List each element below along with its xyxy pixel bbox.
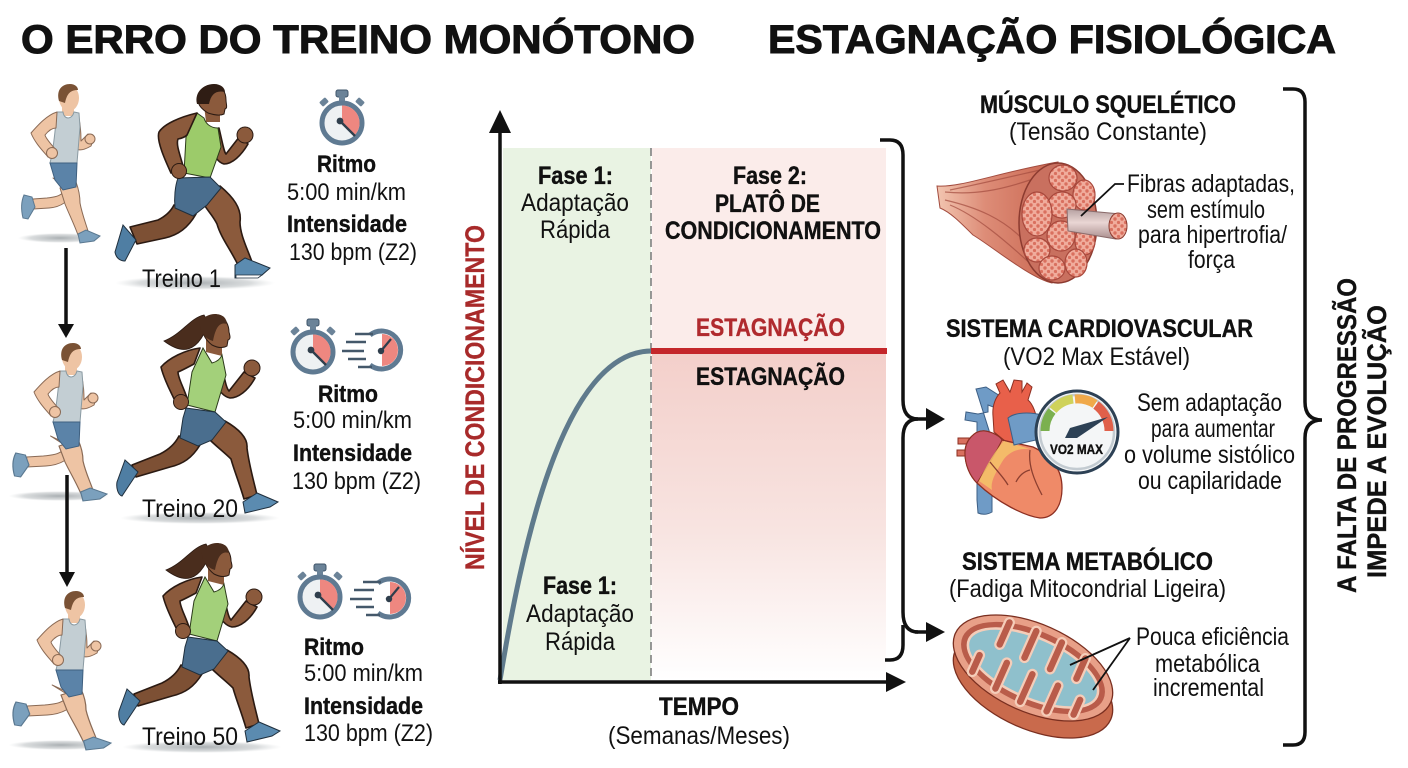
arrow: to metabolic: [915, 622, 945, 642]
label: fase 2: [665, 162, 881, 245]
description: músculo: [1127, 170, 1295, 274]
label: treino 50: Treino 50: [142, 723, 238, 751]
icon: stopwatch: [290, 319, 336, 372]
axis label: x: [608, 693, 790, 750]
axis: vertical: [489, 110, 511, 684]
icon: vo2 max gauge: VO2 MAX: [1050, 441, 1104, 457]
runner: woman in green tank: [117, 314, 280, 524]
description: cardiovascular: Sem adaptação: [1137, 389, 1282, 417]
title: o erro do treino monótono: O ERRO DO TREINO MONÓTONO: [21, 16, 695, 62]
stats: treino 20: 5:00 min/km: [293, 407, 412, 434]
runner: man in grey tank: [8, 591, 114, 750]
icon: mitochondrion: [937, 593, 1130, 760]
stats: treino 1: Ritmo: [317, 151, 376, 178]
description: cardiovascular: para aumentar: [1151, 415, 1275, 443]
heading: músculo: [980, 89, 1236, 146]
chart: plateau curve: [459, 110, 906, 750]
stats: treino 50: 5:00 min/km: [304, 660, 423, 687]
description: músculo: Fibras adaptadas,: [1127, 170, 1295, 198]
heading: metabólico: (Fadiga Mitocondrial Ligeira): [949, 575, 1226, 603]
runner: woman in green tank: [119, 543, 282, 753]
runner: man in grey tank: [18, 84, 102, 243]
stats: treino 1: [287, 151, 417, 266]
arrow: to cardiovascular: [915, 408, 945, 430]
heading: cardiovascular: (VO2 Max Estável): [1003, 343, 1190, 371]
arrow: treino 1 to treino 20: [58, 248, 74, 338]
icon: vo2 max gauge: [1036, 391, 1118, 473]
stats: treino 50: Intensidade: [304, 693, 423, 720]
heading: músculo: (Tensão Constante): [1009, 118, 1207, 146]
stats: treino 50: [304, 634, 433, 747]
stats: treino 50: 130 bpm (Z2): [304, 720, 433, 747]
label: fase 1 bottom: Fase 1:: [543, 572, 617, 600]
label: fase 1 bottom: Rápida: [545, 628, 615, 656]
label: fase 1 top: [521, 162, 629, 244]
curve: conditioning level: [500, 351, 651, 680]
conclusion: vertical text: A FALTA DE PROGRESSÃO: [1331, 278, 1362, 593]
label: estagnação black: ESTAGNAÇÃO: [696, 361, 845, 391]
label: fase 2: CONDICIONAMENTO: [665, 217, 881, 245]
icon: stopwatch: [297, 564, 343, 617]
bracket: right brace: [1283, 89, 1322, 745]
panel: sistema cardiovascular: [946, 315, 1295, 518]
panel: treino 20: [9, 314, 421, 524]
axis label: x: TEMPO: [659, 693, 739, 721]
heading: músculo: MÚSCULO SQUELÉTICO: [980, 89, 1236, 119]
heading: metabólico: [949, 546, 1226, 603]
description: metabólico: metabólica: [1155, 650, 1260, 678]
heading: cardiovascular: [946, 315, 1253, 371]
description: músculo: força: [1188, 246, 1235, 274]
icon: stopwatch: [319, 90, 365, 143]
axis label: x: (Semanas/Meses): [608, 722, 790, 750]
axis: horizontal: [498, 672, 906, 692]
description: metabólico: [1136, 623, 1289, 702]
heading: metabólico: SISTEMA METABÓLICO: [962, 546, 1213, 576]
bracket: chart to systems: [880, 140, 945, 660]
label: treino 20: Treino 20: [142, 495, 238, 523]
label: fase 2: Fase 2:: [733, 162, 807, 190]
arrow: treino 20 to treino 50: [59, 475, 75, 587]
icon: muscle cross-section: [937, 162, 1127, 283]
runner: man in grey tank: [9, 343, 109, 501]
label: fase 2: PLATÔ DE: [715, 188, 820, 218]
stats: treino 1: 130 bpm (Z2): [289, 239, 417, 266]
description: metabólico: Pouca eficiência: [1136, 623, 1289, 651]
panel: treino 50: [8, 543, 433, 753]
description: cardiovascular: ou capilaridade: [1138, 467, 1282, 495]
stats: treino 1: 5:00 min/km: [287, 179, 406, 206]
axis label: y: NÍVEL DE CONDICIONAMENTO: [459, 225, 490, 570]
description: músculo: para hipertrofia/: [1138, 221, 1287, 249]
label: fase 1 bottom: Adaptação: [526, 600, 634, 628]
panel: treino 1: [18, 84, 417, 293]
icon: fast stopwatch: [342, 331, 401, 369]
description: cardiovascular: o volume sistólico: [1124, 441, 1295, 469]
chart region: fase 1: [503, 148, 651, 680]
conclusion: vertical text: IMPEDE A EVOLUÇÃO: [1361, 305, 1392, 578]
stats: treino 20: Ritmo: [318, 381, 378, 408]
label: estagnação red: ESTAGNAÇÃO: [696, 312, 845, 342]
panel: sistema metabólico: [937, 546, 1289, 760]
icon: fast stopwatch: [350, 579, 409, 617]
icon: heart: [957, 380, 1062, 518]
line: plateau: [651, 348, 887, 354]
conclusion: vertical text: [1331, 278, 1392, 593]
stats: treino 20: [292, 381, 421, 495]
label: fase 1 top: Fase 1:: [538, 162, 613, 190]
description: músculo: sem estímulo: [1147, 196, 1265, 224]
stats: treino 1: Intensidade: [287, 211, 407, 238]
description: cardiovascular: [1124, 389, 1295, 495]
label: treino 1: Treino 1: [142, 265, 221, 293]
heading: cardiovascular: SISTEMA CARDIOVASCULAR: [946, 315, 1253, 343]
stats: treino 50: Ritmo: [304, 634, 364, 661]
panel: músculo esquelético: [937, 89, 1295, 283]
description: metabólico: incremental: [1153, 674, 1264, 702]
label: fase 1 top: Adaptação: [521, 189, 629, 217]
runner: man in green tank: [115, 84, 275, 290]
label: fase 1 top: Rápida: [540, 216, 610, 244]
stats: treino 20: Intensidade: [293, 440, 412, 467]
title: estagnação fisiológica: ESTAGNAÇÃO FISIOLÓGICA: [768, 16, 1336, 62]
label: fase 1 bottom: [526, 572, 634, 656]
chart region: stagnation fade: [652, 351, 886, 680]
chart region: fase 2: [652, 148, 886, 351]
stats: treino 20: 130 bpm (Z2): [292, 468, 421, 495]
